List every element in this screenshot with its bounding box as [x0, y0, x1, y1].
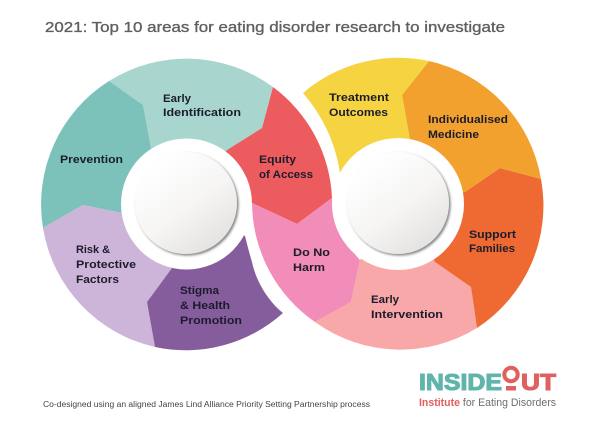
footer note: Co-designed using an aligned James Lind Alliance Priority Setting Partnership process	[43, 400, 370, 409]
logo dash	[506, 386, 516, 390]
label: Individualised Medicine: Individualised	[428, 114, 508, 126]
right hub disc	[347, 152, 449, 254]
label: Early Intervention: Intervention	[371, 309, 443, 321]
right white hub	[332, 138, 464, 270]
left hub disc	[135, 152, 237, 254]
label: Risk and Protective Factors: Protective	[76, 259, 136, 271]
label: Prevention: Prevention	[60, 154, 123, 166]
label: Do No Harm: Harm	[293, 262, 325, 274]
label: Risk and Protective Factors: Factors	[76, 274, 119, 286]
segment: Stigma and Health Promotion	[147, 204, 283, 350]
label: Treatment Outcomes: Outcomes	[329, 107, 388, 119]
label: Equity of Access: of Access	[259, 169, 313, 181]
logo tagline: Institute for Eating Disorders	[419, 397, 556, 409]
segment: Early Identification	[109, 59, 273, 204]
label: Stigma and Health Promotion: Stigma	[180, 285, 220, 297]
diagram: infinity ring	[41, 58, 543, 350]
segment: Prevention	[41, 81, 186, 228]
segment: Support Families	[398, 168, 543, 328]
left white hub	[121, 138, 252, 270]
label: Support Families: Support	[469, 229, 516, 241]
title: 2021: Top 10 areas for eating disorder research to investigate	[45, 19, 505, 36]
segment: Do No Harm	[252, 198, 360, 322]
label: Early Intervention: Early	[371, 294, 399, 306]
label: Individualised Medicine: Medicine	[428, 129, 479, 141]
label: Early Identification: Identification	[163, 107, 241, 119]
segment: Treatment Outcomes	[303, 58, 429, 204]
logo word: UT: UT	[521, 369, 557, 395]
logo letter O	[504, 368, 518, 381]
label: Stigma and Health Promotion: Promotion	[180, 315, 242, 327]
logo word: INSIDE: INSIDE	[419, 369, 502, 395]
label: Equity of Access: Equity	[259, 154, 296, 166]
label: Risk and Protective Factors: Risk &	[76, 244, 110, 256]
label: Early Identification: Early	[163, 93, 191, 105]
label: Treatment Outcomes: Treatment	[329, 92, 389, 104]
label: Stigma and Health Promotion: & Health	[180, 300, 230, 312]
logo: InsideOut Institute	[419, 368, 557, 409]
label: Support Families: Families	[469, 243, 515, 255]
segment: Risk and Protective Factors	[43, 204, 186, 347]
label: Do No Harm: Do No	[293, 247, 330, 259]
segment: Early Intervention	[315, 204, 477, 350]
segment: Equity of Access	[186, 87, 332, 224]
segment: Individualised Medicine	[398, 61, 541, 204]
